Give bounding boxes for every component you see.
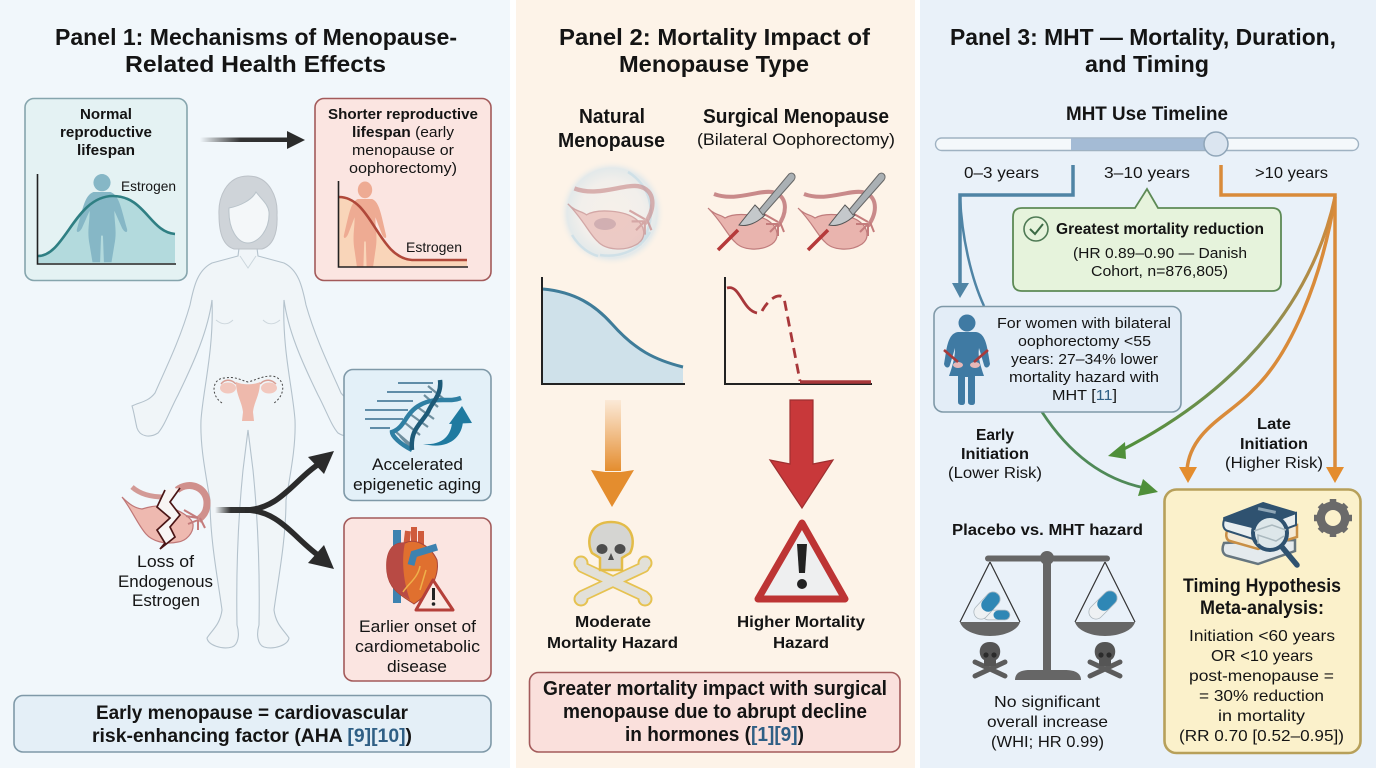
panel 3 title: Panel 3: MHT — Mortality, Duration, [950, 24, 1336, 50]
label: loss of endogenous estrogen: Endogenous [118, 572, 213, 591]
panel 1 title [55, 24, 457, 77]
arrow: higher [770, 400, 833, 508]
box: timing hypothesis: (RR 0.70 [0.52–0.95]) [1179, 728, 1344, 745]
box: normal reproductive lifespan: lifespan [77, 142, 135, 159]
box: earlier cardiometabolic disease: Earlier onset of [359, 617, 476, 636]
heading: surgical menopause [697, 106, 895, 149]
callout: cardiovascular risk factor: Early menopause = cardiovascular [96, 703, 409, 724]
label: late initiation: Late [1257, 416, 1291, 433]
icon: natural ovary [559, 160, 665, 266]
icon: warning triangle [758, 523, 845, 599]
panel 1: mechanisms [0, 0, 510, 768]
panel 1 title: Related Health Effects [125, 51, 386, 77]
label: no significant increase: (WHI; HR 0.99) [991, 734, 1104, 751]
box: shorter reproductive lifespan: menopause or [352, 142, 454, 159]
icon: skull and crossbones [574, 522, 652, 606]
heading: placebo vs MHT: Placebo vs. MHT hazard [952, 522, 1143, 539]
box: accelerated epigenetic aging [344, 370, 491, 500]
callout: greater mortality impact [530, 672, 900, 752]
heading: natural menopause: Natural [579, 106, 645, 128]
box: timing hypothesis: = 30% reduction [1199, 688, 1324, 705]
central body figure [132, 176, 364, 648]
heading: surgical menopause: Surgical Menopause [703, 106, 889, 128]
chart: surgical abrupt decline [725, 277, 872, 384]
icon: woman with surgery marks [944, 314, 990, 405]
pills [981, 598, 1110, 615]
estrogen decline chart [338, 181, 468, 267]
heading: natural menopause [558, 106, 665, 152]
box: timing hypothesis: post-menopause = [1189, 668, 1334, 685]
box: earlier cardiometabolic disease [344, 518, 491, 681]
estrogen decline chart: Estrogen [406, 239, 462, 255]
icon: DNA with speed lines [365, 380, 472, 450]
timeline labels: 3–10 years [1104, 165, 1190, 182]
box: bilateral oophorectomy: MHT [11] [1052, 387, 1117, 404]
panel 3 title [950, 24, 1336, 77]
box: timing hypothesis: OR <10 years [1211, 648, 1313, 665]
label: higher mortality hazard: Higher Mortality [737, 614, 865, 631]
box: timing hypothesis: Initiation <60 years [1189, 628, 1335, 645]
callout: cardiovascular risk factor [14, 696, 491, 752]
icon: damaged ovary [122, 486, 207, 549]
callout: greatest mortality reduction: Cohort, n=876,805) [1091, 263, 1228, 280]
box: timing hypothesis [1164, 490, 1360, 753]
icon: surgical ovaries with scalpels [708, 173, 885, 250]
box: bilateral oophorectomy: years: 27–34% lower [1011, 351, 1158, 368]
box: accelerated epigenetic aging: Accelerated [372, 455, 463, 474]
estrogen bell curve chart [38, 174, 176, 264]
label: loss of endogenous estrogen: Loss of [137, 552, 194, 571]
label: early initiation: Initiation [961, 446, 1029, 463]
arrow: orange to green curve [1108, 197, 1335, 459]
callout: greatest mortality reduction: (HR 0.89–0.90 — Danish [1073, 245, 1247, 262]
box: shorter reproductive lifespan: lifespan (early [352, 124, 455, 141]
label: moderate mortality hazard [547, 614, 678, 652]
icon: books and magnifier [1223, 503, 1297, 565]
arrow: normal to shorter [200, 131, 305, 149]
panel 3: MHT [920, 0, 1376, 768]
box: earlier cardiometabolic disease: disease [387, 657, 447, 676]
label: moderate mortality hazard: Mortality Hazard [547, 635, 678, 652]
branching arrows [215, 451, 334, 569]
label: early initiation [948, 427, 1042, 482]
box: bilateral oophorectomy: oophorectomy <55 [1018, 333, 1151, 350]
callout: greater mortality impact: in hormones ([1][9]) [625, 724, 804, 746]
callout: greater mortality impact: Greater mortality impact with surgical [543, 678, 887, 700]
icon: check circle [1024, 217, 1048, 241]
box: shorter reproductive lifespan: Shorter reproductive [328, 106, 478, 123]
callout: greatest mortality reduction [1013, 189, 1281, 291]
label: no significant increase [987, 694, 1108, 751]
callout: cardiovascular risk factor: risk-enhancing factor (AHA [9][10]) [92, 726, 412, 747]
callout: greatest mortality reduction: Greatest mortality reduction [1056, 221, 1264, 238]
label: early initiation: Early [976, 427, 1014, 444]
label: no significant increase: overall increase [987, 714, 1108, 731]
box: bilateral oophorectomy [934, 306, 1181, 412]
timeline labels [964, 165, 1328, 182]
arrow: early path to bilateral box [952, 165, 1073, 306]
icon: uterus [214, 376, 283, 421]
box: shorter reproductive lifespan [315, 98, 491, 280]
timeline heading: MHT Use Timeline [1066, 104, 1228, 125]
panel 2 title: Menopause Type [619, 51, 809, 77]
box: normal reproductive lifespan: reproductive [60, 124, 152, 141]
panel 3 title: and Timing [1085, 51, 1209, 77]
timeline labels: >10 years [1255, 165, 1328, 182]
icon: gear [1314, 499, 1352, 537]
box: accelerated epigenetic aging: epigenetic aging [353, 475, 481, 494]
label: moderate mortality hazard: Moderate [575, 614, 651, 631]
label: higher mortality hazard: Hazard [773, 635, 829, 652]
arrows: late initiation [1179, 165, 1344, 483]
box: normal reproductive lifespan [25, 98, 187, 280]
panel 2 title [559, 24, 870, 77]
icon: balance scale [960, 551, 1135, 680]
panel 2: mortality impact [516, 0, 915, 768]
label: late initiation [1225, 416, 1323, 472]
label: loss of endogenous estrogen [118, 552, 213, 610]
label: early initiation: (Lower Risk) [948, 465, 1042, 482]
box: bilateral oophorectomy: mortality hazard with [1009, 369, 1159, 386]
icon: heart with warning [387, 527, 453, 610]
panel 2 title: Panel 2: Mortality Impact of [559, 24, 870, 50]
box: timing hypothesis: Timing Hypothesis [1183, 576, 1341, 597]
panel 1 title: Panel 1: Mechanisms of Menopause- [55, 24, 457, 50]
callout: greater mortality impact: menopause due to abrupt decline [563, 701, 867, 723]
label: late initiation: (Higher Risk) [1225, 455, 1323, 472]
arrow: bilateral box to timing box [1042, 412, 1158, 496]
timeline labels: 0–3 years [964, 165, 1039, 182]
label: higher mortality hazard [737, 614, 865, 652]
chart: natural decline [542, 277, 685, 384]
heading: natural menopause: Menopause [558, 130, 665, 152]
label: late initiation: Initiation [1240, 436, 1308, 453]
box: normal reproductive lifespan: Normal [80, 106, 132, 123]
box: timing hypothesis: Meta-analysis: [1200, 598, 1324, 619]
box: earlier cardiometabolic disease: cardiometabolic [355, 637, 481, 656]
estrogen bell curve chart: Estrogen [121, 178, 176, 194]
box: bilateral oophorectomy: For women with bilateral [997, 315, 1171, 332]
box: timing hypothesis: in mortality [1218, 708, 1305, 725]
label: loss of endogenous estrogen: Estrogen [132, 591, 200, 610]
box: shorter reproductive lifespan: oophorectomy) [349, 160, 457, 177]
heading: surgical menopause: (Bilateral Oophorectomy) [697, 130, 895, 149]
timeline slider [936, 132, 1358, 156]
label: no significant increase: No significant [994, 694, 1101, 711]
arrow: moderate [591, 400, 634, 507]
